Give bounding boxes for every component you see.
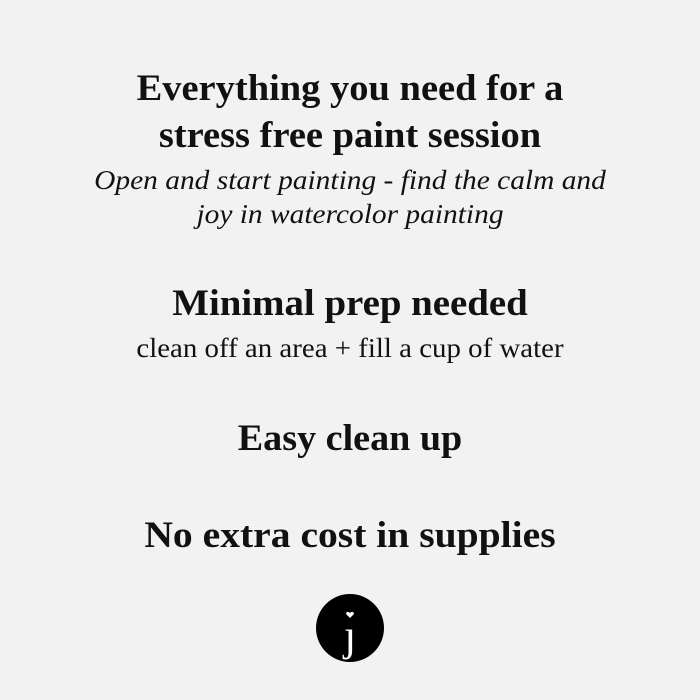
title bbox=[137, 68, 563, 156]
text: prep description: clean off an area + fill a cup of water bbox=[136, 333, 564, 363]
title: stress free paint session bbox=[159, 115, 541, 156]
heading: no extra cost: No extra cost in supplies bbox=[144, 515, 556, 556]
subtitle: Open and start painting - find the calm and bbox=[94, 165, 606, 195]
icon: logo j bbox=[316, 594, 384, 662]
icon: logo j: ȷ bbox=[342, 611, 356, 660]
title: Everything you need for a bbox=[137, 68, 563, 109]
heading: minimal prep: Minimal prep needed bbox=[172, 283, 528, 324]
heading: easy clean up: Easy clean up bbox=[238, 418, 462, 459]
subtitle bbox=[94, 165, 606, 229]
subtitle: joy in watercolor painting bbox=[196, 199, 504, 229]
